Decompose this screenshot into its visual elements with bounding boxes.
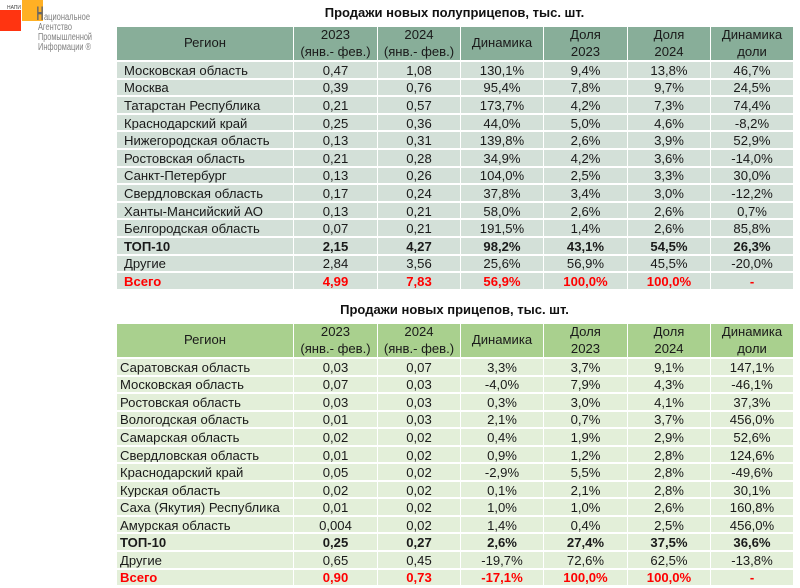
table: продажи новых полуприцепов: 58,0% bbox=[483, 204, 521, 219]
table: продажи новых прицепов: Доля bbox=[570, 324, 601, 339]
table: продажи новых прицепов: (янв.- фев.) bbox=[384, 340, 454, 356]
table: продажи новых полуприцепов: 0,21 bbox=[323, 151, 348, 166]
table: продажи новых полуприцепов: 4,99 bbox=[323, 274, 348, 289]
table: продажи новых прицепов: 2,5% bbox=[654, 518, 684, 533]
table: продажи новых полуприцепов: 3,3% bbox=[654, 168, 684, 183]
table: продажи новых полуприцепов: 52,9% bbox=[733, 133, 771, 148]
table: продажи новых полуприцепов: 0,21 bbox=[406, 204, 432, 219]
table: продажи новых прицепов: 0,25 bbox=[323, 535, 348, 550]
table: продажи новых полуприцепов: 30,0% bbox=[733, 168, 771, 183]
table: продажи новых полуприцепов: 1,4% bbox=[571, 221, 600, 236]
table: продажи новых полуприцепов: 100,0% bbox=[647, 274, 691, 289]
table: продажи новых полуприцепов: 0,39 bbox=[323, 80, 348, 95]
table: продажи новых полуприцепов: (янв.- фев.) bbox=[384, 44, 454, 58]
table: продажи новых полуприцепов: 24,5% bbox=[733, 80, 771, 95]
table: продажи новых полуприцепов: 0,17 bbox=[323, 186, 348, 201]
table: продажи новых прицепов: 3,0% bbox=[571, 395, 600, 410]
table: продажи новых полуприцепов: 56,9% bbox=[483, 274, 521, 289]
table: продажи новых прицепов: 100,0% bbox=[563, 570, 608, 585]
table: продажи новых прицепов: 3,7% bbox=[571, 360, 600, 375]
table: продажи новых полуприцепов: 2023 bbox=[321, 27, 350, 42]
table: продажи новых полуприцепов: Доля bbox=[570, 27, 601, 42]
table: продажи новых прицепов: Амурская область bbox=[120, 518, 231, 533]
table: продажи новых прицепов: 0,02 bbox=[406, 465, 432, 480]
table: продажи новых полуприцепов: 0,31 bbox=[406, 133, 432, 148]
table: продажи новых прицепов: 0,03 bbox=[323, 395, 348, 410]
table: продажи новых полуприцепов: Регион bbox=[184, 35, 226, 50]
table: продажи новых прицепов: 3,7% bbox=[654, 412, 684, 427]
table: продажи новых прицепов: 5,5% bbox=[571, 465, 600, 480]
table: продажи новых прицепов: 0,01 bbox=[323, 412, 348, 427]
table: продажи новых прицепов: (янв.- фев.) bbox=[300, 340, 371, 356]
table: продажи новых полуприцепов: Белгородская область bbox=[124, 221, 260, 236]
table: продажи новых полуприцепов: 0,47 bbox=[323, 63, 348, 78]
table: продажи новых прицепов: 2,1% bbox=[487, 412, 517, 427]
table: продажи новых полуприцепов: 4,2% bbox=[571, 151, 600, 166]
table: продажи новых полуприцепов: 45,5% bbox=[650, 256, 688, 271]
table: продажи новых полуприцепов: 0,7% bbox=[737, 204, 767, 219]
table: продажи новых полуприцепов: 0,21 bbox=[406, 221, 432, 236]
table: продажи новых прицепов: -13,8% bbox=[731, 553, 773, 568]
table: продажи новых полуприцепов: 44,0% bbox=[483, 116, 521, 131]
table: продажи новых прицепов: Другие bbox=[120, 553, 162, 568]
table: продажи новых полуприцепов: 0,36 bbox=[406, 116, 432, 131]
table: продажи новых полуприцепов: 46,7% bbox=[733, 63, 771, 78]
table: продажи новых прицепов: 0,05 bbox=[323, 465, 348, 480]
table: продажи новых прицепов: 62,5% bbox=[650, 553, 688, 568]
table: продажи новых прицепов: 0,02 bbox=[406, 500, 432, 515]
table: продажи новых прицепов: 2,6% bbox=[654, 500, 684, 515]
table: продажи новых полуприцепов: -8,2% bbox=[735, 116, 769, 131]
table: продажи новых прицепов: 0,4% bbox=[571, 518, 600, 533]
table: продажи новых прицепов: 0,02 bbox=[406, 483, 432, 498]
title: прицепы: Продажи новых прицепов, тыс. шт. bbox=[340, 302, 569, 317]
table: продажи новых полуприцепов: Татарстан Республика bbox=[124, 98, 260, 113]
table: продажи новых прицепов: 2,9% bbox=[654, 430, 684, 445]
table: продажи новых полуприцепов: 2,6% bbox=[571, 133, 600, 148]
table: продажи новых прицепов: Свердловская область bbox=[120, 448, 259, 462]
table: продажи новых прицепов: 2,8% bbox=[654, 465, 684, 480]
table: продажи новых прицепов: 0,27 bbox=[406, 535, 432, 550]
table: продажи новых полуприцепов: 3,4% bbox=[571, 186, 600, 201]
table: продажи новых полуприцепов: Динамика bbox=[722, 27, 782, 42]
table: продажи новых полуприцепов: 139,8% bbox=[480, 133, 524, 148]
table: продажи новых полуприцепов: 191,5% bbox=[480, 221, 524, 236]
table: продажи новых полуприцепов: 3,9% bbox=[654, 133, 684, 148]
table: продажи новых полуприцепов: 0,24 bbox=[406, 186, 432, 201]
table: продажи новых прицепов: 36,6% bbox=[733, 535, 771, 550]
table: продажи новых прицепов: 0,004 bbox=[319, 518, 352, 533]
table: продажи новых прицепов: -49,6% bbox=[731, 465, 773, 480]
table: продажи новых полуприцепов: -14,0% bbox=[731, 151, 773, 166]
table: продажи новых прицепов: 2,8% bbox=[654, 483, 684, 498]
table: продажи новых прицепов: 1,2% bbox=[571, 448, 600, 462]
table: продажи новых прицепов: Московская область bbox=[120, 377, 244, 392]
table: продажи новых прицепов: 456,0% bbox=[730, 412, 774, 427]
title: полуприцепы: Продажи новых полуприцепов, тыс. шт. bbox=[325, 5, 584, 20]
table: продажи новых прицепов: 100,0% bbox=[647, 570, 691, 585]
table: продажи новых прицепов: 0,1% bbox=[487, 483, 517, 498]
table: продажи новых прицепов: 0,73 bbox=[406, 570, 432, 585]
table: продажи новых полуприцепов: 3,56 bbox=[406, 256, 432, 271]
table: продажи новых полуприцепов: 25,6% bbox=[483, 256, 521, 271]
table: продажи новых полуприцепов: Свердловская область bbox=[124, 186, 263, 201]
table: продажи новых полуприцепов: 100,0% bbox=[563, 274, 608, 289]
table: продажи новых прицепов: 0,4% bbox=[487, 430, 517, 445]
table: продажи новых полуприцепов: 0,13 bbox=[323, 204, 348, 219]
table: продажи новых полуприцепов: Нижегородская область bbox=[124, 133, 270, 148]
table: продажи новых полуприцепов: 0,76 bbox=[406, 80, 432, 95]
table: продажи новых полуприцепов: 4,6% bbox=[654, 116, 684, 131]
table: продажи новых прицепов: -19,7% bbox=[481, 553, 523, 568]
table: продажи новых прицепов: 27,4% bbox=[567, 535, 604, 550]
table: продажи новых прицепов: Саратовская область bbox=[120, 360, 250, 375]
table: продажи новых прицепов: Ростовская область bbox=[120, 395, 241, 410]
table: продажи новых прицепов: 0,90 bbox=[323, 570, 348, 585]
table: продажи новых прицепов: 0,03 bbox=[406, 412, 432, 427]
logo: НАПИ: Н bbox=[36, 3, 44, 25]
table: продажи новых прицепов: Доля bbox=[654, 324, 684, 339]
table: продажи новых прицепов: 1,9% bbox=[571, 430, 600, 445]
table: продажи новых прицепов: 3,3% bbox=[487, 360, 517, 375]
table: продажи новых полуприцепов: Санкт-Петербург bbox=[124, 168, 227, 183]
table: продажи новых полуприцепов: 2,15 bbox=[323, 239, 348, 254]
table: продажи новых прицепов: -46,1% bbox=[731, 377, 773, 392]
table: продажи новых прицепов: Вологодская область bbox=[120, 412, 249, 427]
table: продажи новых полуприцепов: 2,6% bbox=[571, 204, 600, 219]
table: продажи новых прицепов: Динамика bbox=[472, 332, 532, 347]
table: продажи новых прицепов: 0,02 bbox=[406, 518, 432, 533]
table: продажи новых полуприцепов: 85,8% bbox=[733, 221, 771, 236]
logo: НАПИ: Агентство bbox=[38, 22, 72, 33]
table: продажи новых полуприцепов: -20,0% bbox=[731, 256, 773, 271]
table: продажи новых прицепов: 0,01 bbox=[323, 448, 348, 462]
table: продажи новых полуприцепов: 2024 bbox=[404, 27, 434, 42]
table: продажи новых прицепов: 37,5% bbox=[650, 535, 688, 550]
table: продажи новых полуприцепов: Динамика bbox=[472, 35, 532, 50]
table: продажи новых полуприцепов: 7,3% bbox=[654, 98, 684, 113]
table: продажи новых прицепов: 4,1% bbox=[654, 395, 684, 410]
table: продажи новых полуприцепов: 2023 bbox=[571, 44, 600, 58]
table: продажи новых полуприцепов: 34,9% bbox=[483, 151, 521, 166]
table: продажи новых прицепов: 0,3% bbox=[487, 395, 517, 410]
table: продажи новых полуприцепов: Ростовская область bbox=[124, 151, 245, 166]
table: продажи новых прицепов: Курская область bbox=[120, 483, 220, 498]
table: продажи новых полуприцепов: 13,8% bbox=[650, 63, 688, 78]
table: продажи новых полуприцепов: ТОП-10 bbox=[124, 239, 170, 254]
table: продажи новых прицепов: 30,1% bbox=[733, 483, 771, 498]
table: продажи новых полуприцепов: Другие bbox=[124, 256, 166, 271]
table: продажи новых полуприцепов: 0,13 bbox=[323, 168, 348, 183]
table: продажи новых полуприцепов: 3,0% bbox=[654, 186, 684, 201]
table: продажи новых прицепов: - bbox=[750, 570, 754, 585]
table: продажи новых полуприцепов: 0,21 bbox=[323, 98, 348, 113]
table: продажи новых прицепов bbox=[117, 324, 793, 585]
table: продажи новых прицепов: 1,0% bbox=[571, 500, 600, 515]
table: продажи новых полуприцепов: 9,7% bbox=[654, 80, 684, 95]
table: продажи новых полуприцепов: 0,57 bbox=[406, 98, 432, 113]
table: продажи новых прицепов: 0,02 bbox=[323, 430, 348, 445]
table: продажи новых прицепов: 2023 bbox=[571, 340, 600, 356]
table: продажи новых прицепов: 2023 bbox=[321, 324, 350, 339]
table: продажи новых полуприцепов: 3,6% bbox=[654, 151, 684, 166]
table: продажи новых полуприцепов: 0,25 bbox=[323, 116, 348, 131]
table: продажи новых полуприцепов: 2024 bbox=[654, 44, 684, 58]
table: продажи новых полуприцепов: -12,2% bbox=[731, 186, 773, 201]
table: продажи новых полуприцепов: Ханты-Мансийский АО bbox=[124, 204, 263, 219]
table: продажи новых прицепов: 2,1% bbox=[571, 483, 600, 498]
table: продажи новых полуприцепов: 0,07 bbox=[323, 221, 348, 236]
table: продажи новых полуприцепов: 0,13 bbox=[323, 133, 348, 148]
table: продажи новых прицепов: 0,07 bbox=[406, 360, 432, 375]
table: продажи новых прицепов: 160,8% bbox=[730, 500, 774, 515]
table: продажи новых полуприцепов: Всего bbox=[124, 274, 161, 289]
table: продажи новых полуприцепов: 74,4% bbox=[733, 98, 771, 113]
table: продажи новых полуприцепов: 7,8% bbox=[571, 80, 600, 95]
logo: НАПИ: НАПИ bbox=[7, 5, 21, 11]
table: продажи новых полуприцепов: 9,4% bbox=[571, 63, 600, 78]
table: продажи новых прицепов: 2,6% bbox=[487, 535, 517, 550]
table: продажи новых полуприцепов: Доля bbox=[654, 27, 684, 42]
table: продажи новых прицепов: Саха (Якутия) Республика bbox=[120, 500, 280, 515]
table: продажи новых полуприцепов: 4,2% bbox=[571, 98, 600, 113]
table: продажи новых прицепов: доли bbox=[737, 340, 767, 356]
table: продажи новых прицепов: 1,4% bbox=[487, 518, 517, 533]
table: продажи новых полуприцепов: 2,6% bbox=[654, 221, 684, 236]
table: продажи новых прицепов: -17,1% bbox=[481, 570, 523, 585]
table: продажи новых полуприцепов: 95,4% bbox=[483, 80, 521, 95]
table: продажи новых полуприцепов: 7,83 bbox=[406, 274, 432, 289]
table: продажи новых полуприцепов: 43,1% bbox=[567, 239, 604, 254]
table: продажи новых прицепов: 456,0% bbox=[730, 518, 774, 533]
table: продажи новых прицепов: ТОП-10 bbox=[120, 535, 166, 550]
table: продажи новых полуприцепов: 2,84 bbox=[323, 256, 348, 271]
table: продажи новых полуприцепов: 2,5% bbox=[571, 168, 600, 183]
table: продажи новых прицепов: 9,1% bbox=[654, 360, 684, 375]
table: продажи новых прицепов: Всего bbox=[120, 570, 157, 585]
table: продажи новых прицепов: 0,7% bbox=[571, 412, 600, 427]
table: продажи новых прицепов: 0,01 bbox=[323, 500, 348, 515]
table: продажи новых прицепов: 0,02 bbox=[406, 448, 432, 462]
table: продажи новых прицепов: 2024 bbox=[654, 340, 684, 356]
table: продажи новых полуприцепов: 2,6% bbox=[654, 204, 684, 219]
table: продажи новых прицепов: 52,6% bbox=[733, 430, 771, 445]
table: продажи новых прицепов: 0,03 bbox=[406, 395, 432, 410]
table: продажи новых полуприцепов: 5,0% bbox=[571, 116, 600, 131]
table: продажи новых полуприцепов: доли bbox=[737, 44, 767, 58]
table: продажи новых полуприцепов: 104,0% bbox=[480, 168, 524, 183]
table: продажи новых полуприцепов: 0,28 bbox=[406, 151, 432, 166]
table: продажи новых полуприцепов: 54,5% bbox=[650, 239, 688, 254]
table: продажи новых прицепов: Самарская область bbox=[120, 430, 240, 445]
table: продажи новых прицепов: 147,1% bbox=[730, 360, 774, 375]
table: продажи новых прицепов: 2024 bbox=[404, 324, 434, 339]
table: продажи новых прицепов: Регион bbox=[184, 332, 226, 347]
table: продажи новых полуприцепов: 56,9% bbox=[567, 256, 604, 271]
table: продажи новых полуприцепов bbox=[117, 27, 793, 289]
table: продажи новых полуприцепов: Московская область bbox=[124, 63, 248, 78]
table: продажи новых прицепов: 2,8% bbox=[654, 448, 684, 462]
table: продажи новых полуприцепов: (янв.- фев.) bbox=[300, 44, 371, 58]
table: продажи новых прицепов: 0,02 bbox=[406, 430, 432, 445]
table: продажи новых прицепов: 0,02 bbox=[323, 483, 348, 498]
table: продажи новых прицепов: 0,9% bbox=[487, 448, 517, 462]
table: продажи новых прицепов: Динамика bbox=[722, 324, 782, 339]
table: продажи новых полуприцепов: 4,27 bbox=[406, 239, 432, 254]
table: продажи новых прицепов: 1,0% bbox=[487, 500, 517, 515]
table: продажи новых полуприцепов: Москва bbox=[124, 80, 169, 95]
table: продажи новых прицепов: 4,3% bbox=[654, 377, 684, 392]
table: продажи новых прицепов: 0,03 bbox=[323, 360, 348, 375]
table: продажи новых прицепов: 0,07 bbox=[323, 377, 348, 392]
table: продажи новых полуприцепов: Краснодарский край bbox=[124, 116, 247, 131]
table: продажи новых прицепов: 0,03 bbox=[406, 377, 432, 392]
logo: НАПИ bbox=[0, 0, 92, 53]
table: продажи новых прицепов: 124,6% bbox=[730, 448, 774, 462]
table: продажи новых прицепов: 0,65 bbox=[323, 553, 348, 568]
table: продажи новых полуприцепов: 1,08 bbox=[406, 63, 432, 78]
table: продажи новых прицепов: Краснодарский край bbox=[120, 465, 243, 480]
table: продажи новых полуприцепов: 37,8% bbox=[483, 186, 521, 201]
table: продажи новых полуприцепов: 0,26 bbox=[406, 168, 432, 183]
table: продажи новых прицепов: 72,6% bbox=[567, 553, 604, 568]
table: продажи новых полуприцепов: 130,1% bbox=[480, 63, 524, 78]
table: продажи новых полуприцепов: 173,7% bbox=[480, 98, 524, 113]
table: продажи новых прицепов: -4,0% bbox=[485, 377, 519, 392]
table: продажи новых полуприцепов: - bbox=[750, 274, 754, 289]
table: продажи новых прицепов: 7,9% bbox=[571, 377, 600, 392]
table: продажи новых прицепов: -2,9% bbox=[485, 465, 519, 480]
table: продажи новых прицепов: 0,45 bbox=[406, 553, 432, 568]
table: продажи новых полуприцепов: 26,3% bbox=[733, 239, 771, 254]
table: продажи новых прицепов: 37,3% bbox=[733, 395, 771, 410]
table: продажи новых полуприцепов: 98,2% bbox=[483, 239, 521, 254]
